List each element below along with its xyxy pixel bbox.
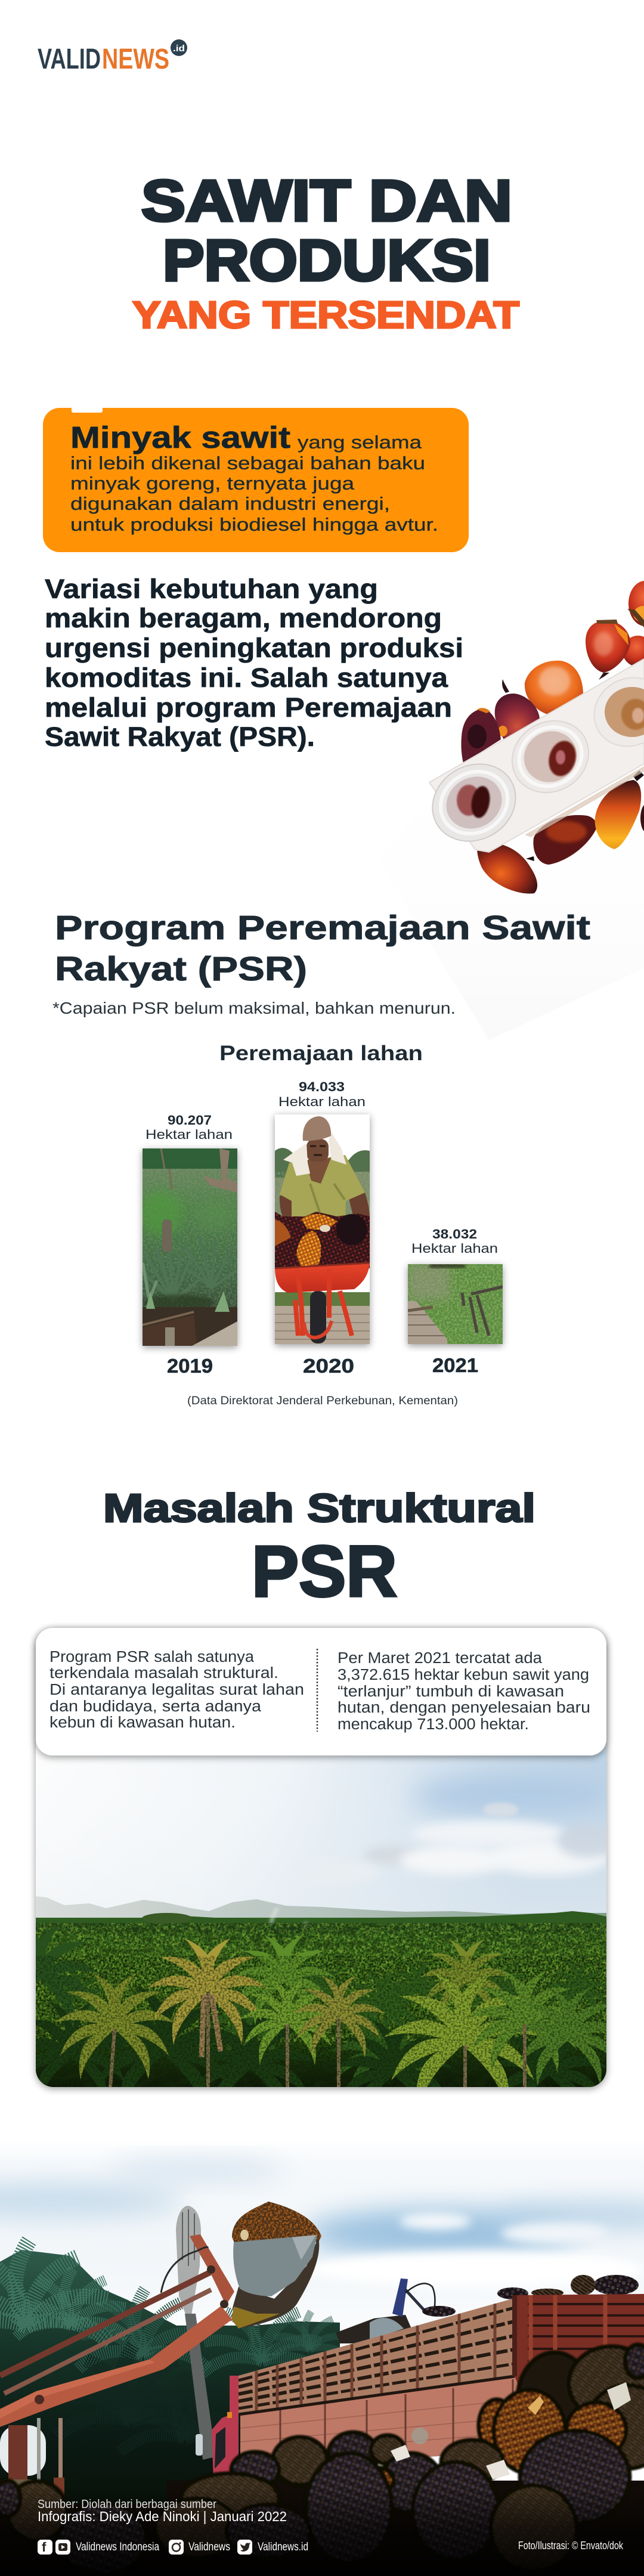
year labels: 2019 (167, 1355, 213, 1377)
right text (338, 1650, 590, 1733)
right text: Per Maret 2021 tercatat ada (338, 1650, 543, 1667)
title: PRODUKSI (163, 228, 491, 293)
tree line (0, 2240, 348, 2516)
heading: Program Peremajaan Sawit Rakyat: Rakyat (PSR) (55, 950, 307, 988)
left text: dan budidaya, serta adanya (49, 1698, 262, 1715)
chart: peremajaan lahan (140, 1042, 503, 1377)
truck lower panel (240, 2376, 525, 2469)
note: capaian PSR: *Capaian PSR belum maksimal, bahkan menurun. (52, 999, 456, 1017)
excavator arm (0, 2234, 234, 2522)
fruit: lower middle (526, 815, 596, 865)
fruit: lower back (477, 843, 537, 894)
oil well 3 (581, 665, 644, 759)
title: SAWIT DAN (141, 168, 512, 233)
panel: masalah struktural photo and text (0, 1628, 626, 2129)
paragraph: kebutuhan: urgensi peningkatan produksi (45, 633, 463, 663)
fruit pile (0, 2345, 644, 2576)
value 2020: 94.033 (299, 1079, 345, 1094)
label: instagram: Validnews (188, 2541, 230, 2553)
mountains (36, 1896, 606, 1923)
paragraph: kebutuhan: melalui program Peremajaan (45, 692, 452, 723)
right text: hutan, dengan penyelesaian baru (338, 1699, 590, 1716)
forest (36, 1918, 606, 2087)
dead palm trunk (176, 2206, 216, 2460)
value 2020: Hektar lahan (278, 1094, 366, 1109)
left text: Di antaranya legalitas surat lahan (49, 1682, 304, 1698)
paragraph: kebutuhan: makin beragam, mendorong (45, 603, 442, 633)
right text: “terlanjur” tumbuh di kawasan (338, 1683, 564, 1700)
year labels: 2020 (303, 1355, 354, 1377)
photo: loading palm fruit onto truck (0, 2140, 644, 2576)
fruit on truck (422, 2275, 639, 2317)
card: text (36, 1628, 606, 1755)
value 2019: Hektar lahan (145, 1127, 233, 1142)
value 2021: Hektar lahan (411, 1241, 498, 1256)
left text: Program PSR salah satunya (49, 1649, 255, 1665)
value 2019 (145, 1113, 233, 1142)
bar 2020 (275, 1114, 370, 1344)
footer: credits (38, 2498, 287, 2524)
left text: kebun di kawasan hutan. (49, 1714, 236, 1731)
footer: social media (38, 2540, 308, 2555)
fruit: top right (628, 581, 644, 626)
callout: minyak sawit: digunakan dalam industri energi, (70, 493, 390, 514)
label: facebook and youtube: Validnews Indonesia (76, 2541, 159, 2553)
foreground palm trees (0, 1917, 626, 2129)
source note: (Data Direktorat Jenderal Perkebunan, Kementan) (187, 1395, 458, 1407)
oil well 2 (499, 707, 602, 806)
fruit: lower right (595, 770, 644, 849)
left text: terkendala masalah struktural. (49, 1665, 278, 1682)
callout: minyak sawit: Minyak sawit (70, 420, 290, 454)
illustration: palm fruit and oil tray (428, 581, 644, 894)
callout: minyak sawit: minyak goreng, ternyata juga (70, 473, 355, 494)
wheelbarrow on truck (336, 2278, 435, 2343)
oil well 1 (419, 749, 530, 856)
heading: Masalah Struktural PSR: Masalah Struktural (103, 1486, 535, 1531)
tray (419, 659, 644, 856)
icon: youtube (55, 2540, 70, 2555)
chart title: Peremajaan lahan (219, 1042, 423, 1065)
truck rear red section (515, 2294, 644, 2400)
bucket with fruit (231, 2202, 321, 2329)
paragraph: kebutuhan: komoditas ini. Salah satunya (45, 662, 448, 693)
paragraph: kebutuhan: Sawit Rakyat (PSR). (45, 722, 315, 752)
value 2021: 38.032 (432, 1227, 477, 1241)
fruit: orange (525, 661, 583, 714)
fruit: purple with stem (495, 679, 540, 741)
value 2020 (278, 1079, 366, 1109)
callout: minyak sawit: untuk produksi biodiesel hingga avtur. (70, 514, 438, 535)
value 2021 (411, 1227, 498, 1256)
fruit: dark purple (461, 708, 501, 763)
logo: Validnews.id (38, 39, 187, 75)
left text (49, 1649, 304, 1731)
heading: Program Peremajaan Sawit Rakyat (55, 909, 590, 988)
right text: mencakup 713.000 hektar. (338, 1716, 529, 1733)
value 2019: 90.207 (168, 1113, 212, 1128)
logo: Validnews.id: VALID (38, 44, 101, 75)
paragraph: kebutuhan: Variasi kebutuhan yang (45, 574, 378, 604)
logo: Validnews.id: .id (173, 44, 185, 54)
photo: palm plantation (0, 1729, 626, 2129)
footer: credits: Sumber: Diolah dari berbagai sumber (38, 2498, 216, 2511)
truck upper rail (239, 2298, 515, 2414)
callout: minyak sawit (43, 403, 469, 552)
title: YANG TERSENDAT (132, 293, 519, 336)
heading: Masalah Struktural PSR (103, 1486, 535, 1612)
heading: Program Peremajaan Sawit Rakyat: Program Peremajaan Sawit (55, 909, 590, 947)
callout: minyak sawit: yang selama (298, 432, 422, 453)
icon: facebook (38, 2540, 52, 2555)
callout: minyak sawit: ini lebih dikenal sebagai bahan baku (70, 453, 425, 473)
year labels (167, 1354, 478, 1377)
footer: credits: Infografis: Dieky Ade Ninoki | Januari 2022 (38, 2509, 287, 2524)
year labels: 2021 (432, 1354, 478, 1376)
logo: Validnews.id: NEWS (102, 44, 169, 75)
icon: instagram (169, 2540, 184, 2555)
sky (0, 2140, 644, 2378)
bar 2021 (408, 1264, 503, 1344)
icon: facebook: f (42, 2540, 47, 2555)
paragraph: kebutuhan (45, 574, 463, 752)
bar 2019 (140, 1148, 237, 1346)
right text: 3,372.615 hektar kebun sawit yang (338, 1667, 589, 1683)
fruit: red (586, 620, 644, 680)
icon: twitter (237, 2540, 252, 2555)
title (132, 168, 519, 336)
heading: Masalah Struktural PSR: PSR (252, 1531, 397, 1612)
truck cab (196, 2376, 239, 2482)
label: twitter: Validnews.id (258, 2541, 308, 2553)
